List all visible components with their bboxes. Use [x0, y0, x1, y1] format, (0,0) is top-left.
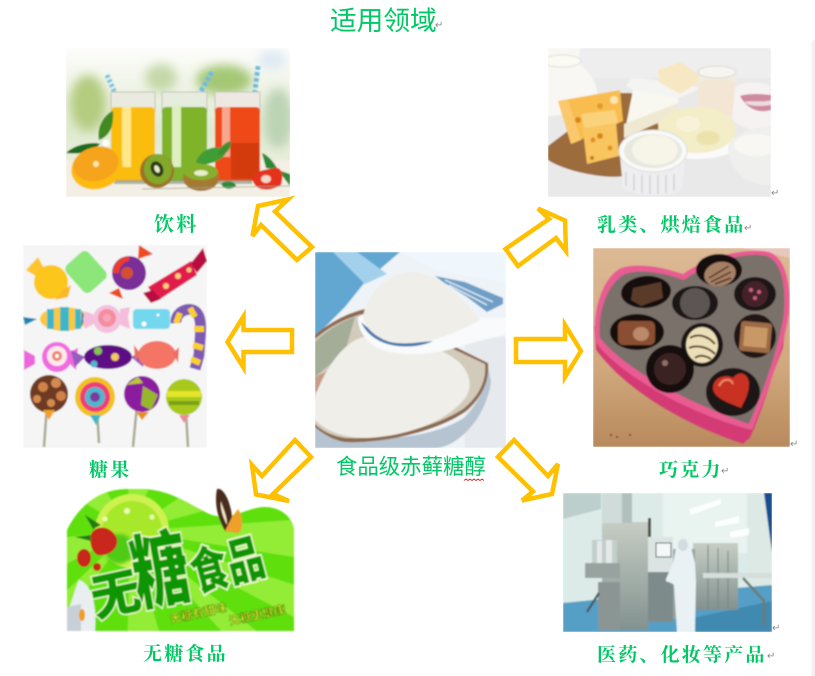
right bowl: [728, 139, 736, 152]
photo: pharma cleanroom: [563, 493, 772, 632]
label: candy: 糖果: [89, 459, 131, 481]
cheese wedge block: [558, 90, 623, 144]
label: beverages: 饮料: [154, 213, 198, 236]
row one: [26, 257, 45, 277]
arrow: to chocolate: [516, 325, 581, 377]
label: sugar-free foods: 无糖食品: [143, 643, 228, 665]
heart box rim: [595, 251, 789, 430]
heart box side: [594, 288, 790, 444]
machine tall tower: [602, 522, 648, 630]
return mark: chocolate label: ↵: [721, 466, 729, 477]
arrow: to pharma and cosmetics: [498, 440, 558, 500]
lollipops: [44, 405, 188, 447]
photo: sugar-free foods poster: 无糖更健康: [228, 602, 287, 628]
photo: sugar-free foods poster: [66, 488, 296, 632]
row two: [23, 317, 37, 325]
right column: [747, 493, 772, 618]
photo: food-grade erythritol: [315, 252, 506, 448]
jar: [698, 75, 736, 82]
photo: dairy and cheese: [543, 48, 778, 197]
arrow: to dairy: [506, 208, 566, 266]
label: center ingredient: 食品级赤藓糖醇: [336, 455, 486, 479]
return mark: dairy photo: ↵: [771, 188, 779, 199]
chocolates: [631, 282, 663, 306]
photo: juice drinks: [66, 48, 292, 197]
leaves: [98, 111, 113, 140]
sugar in bowl: [315, 337, 470, 438]
photo: sugar-free foods poster: 食品: [184, 529, 270, 603]
brie wedge: [626, 90, 678, 124]
cottage cheese bowl: [686, 144, 729, 159]
label: pharma and cosmetics: 医药、化妆等产品: [597, 644, 767, 666]
small poster slogans: 无糖有甜味: [169, 600, 228, 626]
wood board: [548, 93, 660, 177]
photo: sugar-free foods poster: 糖: [125, 522, 196, 621]
arrow: to sugar-free foods: [252, 440, 311, 501]
chocolate cavities: [620, 274, 672, 310]
ramekin: [618, 146, 638, 178]
straws: [104, 74, 117, 92]
return mark: pharma photo: ↵: [772, 623, 780, 634]
lights: [689, 499, 749, 538]
row three: [24, 350, 35, 370]
megaphone: [67, 580, 95, 631]
milk jug: [548, 48, 598, 116]
photo: chocolate: [593, 248, 790, 447]
spoon: [357, 314, 505, 354]
arrow: to candy: [228, 316, 292, 368]
butter: [628, 78, 698, 98]
cane: [176, 309, 201, 369]
return mark: chocolate photo: ↵: [790, 439, 798, 450]
conveyor: [703, 573, 772, 578]
butterfly: [216, 489, 239, 533]
label: chocolate: 巧克力: [659, 458, 723, 481]
return mark: pharma label: ↵: [767, 651, 775, 662]
return mark: title: ↵: [435, 20, 443, 31]
label: dairy and bakery: 乳类、烘焙食品: [597, 214, 745, 236]
floor: [563, 585, 772, 632]
window edge strip: [812, 40, 815, 676]
operator in cleanroom suit: [666, 538, 696, 632]
heart tray: [599, 255, 784, 424]
bowl rim and inside: [315, 307, 488, 442]
strawberry: [252, 168, 282, 190]
big title text on poster: 无: [86, 563, 146, 628]
glasses: [111, 92, 155, 112]
left vessels and bench: [592, 540, 617, 564]
title: 适用领域: [330, 6, 437, 36]
return mark: dairy label: ↵: [744, 223, 752, 234]
photo: candy: [23, 245, 207, 448]
bowl outside: [315, 367, 491, 448]
arrow: to beverages: [252, 200, 312, 260]
orange: [70, 146, 124, 190]
yogurt jar: [732, 82, 771, 131]
strawberries: [90, 528, 117, 555]
kiwis: [140, 154, 174, 188]
cheese block: [582, 121, 620, 165]
sugar in spoon: [363, 272, 480, 343]
machine back: [693, 543, 738, 610]
